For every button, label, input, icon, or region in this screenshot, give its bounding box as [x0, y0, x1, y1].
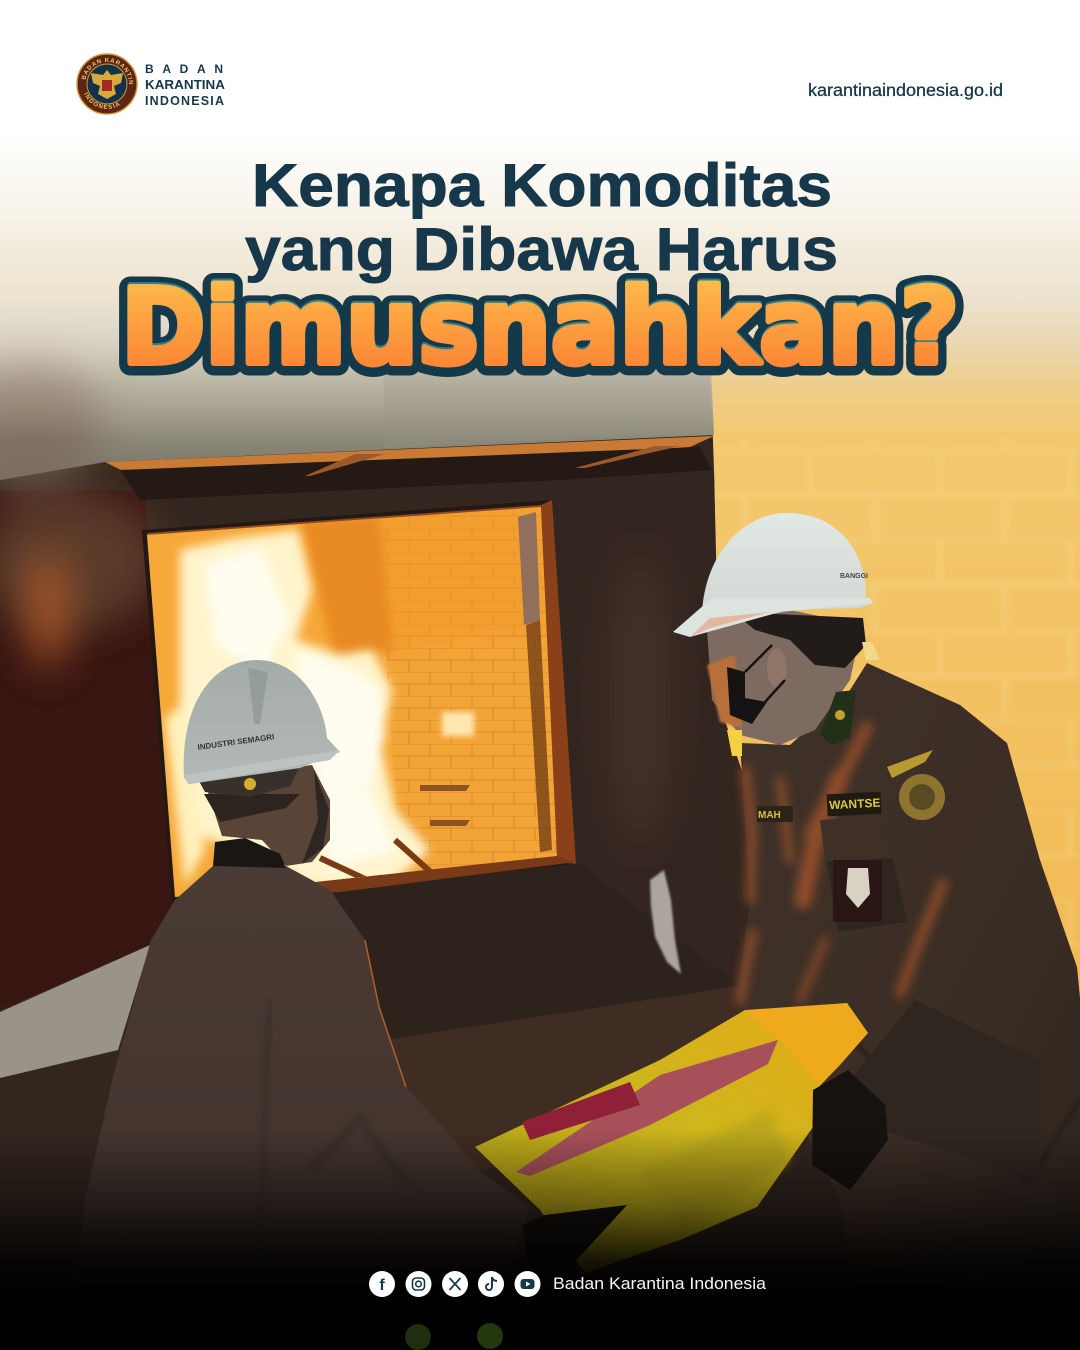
title: first two lines: [245, 152, 838, 283]
breast pocket with emblem: [820, 816, 907, 932]
logo wordmark: BADAN: [145, 62, 223, 76]
chest name tags: MAH: [758, 810, 781, 821]
website url: karantinaindonesia.go.id: [808, 80, 1003, 100]
right officer white helmet: [673, 513, 873, 637]
left officer helmet: INDUSTRI SEMAGRI: [197, 732, 275, 752]
left officer head and neck: [204, 765, 330, 866]
right officer white helmet: BANGGI: [840, 573, 868, 580]
icon: facebook: [369, 1271, 395, 1297]
icon: tiktok: [478, 1271, 504, 1297]
right officer torso: [737, 663, 1080, 1350]
shoulder patch badge: [887, 750, 945, 820]
furnace body: [0, 300, 1080, 1350]
logo: Badan Karantina Indonesia: [76, 53, 225, 115]
title highlight: Dimusnahkan?: Dimusnahkan?: [121, 264, 959, 386]
logo emblem: [76, 53, 138, 115]
blurred green bokeh dots: [405, 1323, 503, 1350]
meat: [516, 1040, 778, 1176]
yellow plastic bag with meat: [475, 1003, 868, 1273]
footer label: Badan Karantina Indonesia: [553, 1274, 767, 1293]
title highlight: Dimusnahkan?: Dimusnahkan?: [121, 267, 959, 389]
collar insignia: [820, 690, 856, 745]
furnace door frame: [142, 500, 576, 904]
metal hood above furnace door: [0, 300, 714, 500]
icon: facebook: f: [379, 1277, 385, 1294]
footer social bar: [369, 1271, 767, 1297]
left officer helmet: [184, 660, 340, 784]
logo wordmark: INDONESIA: [145, 94, 224, 108]
figure: left officer from behind: [70, 660, 530, 1350]
chest name tags: [757, 792, 882, 822]
brick highlights and ash: [442, 712, 474, 736]
concrete ledge at bottom left of furnace: [0, 945, 150, 1078]
furnace window with fire: [147, 505, 557, 897]
left officer jacket: [70, 866, 530, 1350]
chest name tags: WANTSE: [829, 796, 881, 812]
right officer head: [707, 610, 862, 745]
logo wordmark: KARANTINA: [145, 78, 225, 92]
icon: white soot patch on furnace: [650, 870, 681, 974]
title: first two lines: yang Dibawa Harus: [245, 216, 838, 283]
title: first two lines: Kenapa Komoditas: [252, 152, 832, 219]
icon: instagram: [406, 1271, 432, 1297]
icon: youtube: [514, 1271, 540, 1297]
right officer black mask: [727, 667, 767, 724]
black gloves: [523, 1070, 888, 1280]
dark fade at the bottom: [0, 1130, 1080, 1350]
logo wordmark: [145, 62, 225, 108]
figure: right officer: [673, 513, 1080, 1350]
title highlight: Dimusnahkan?: Dimusnahkan?: [121, 266, 959, 388]
smoke fade from white at the top: [0, 0, 1080, 440]
icon: X: [442, 1271, 468, 1297]
logo emblem: INDONESIA: [84, 92, 120, 109]
flames: [165, 530, 430, 890]
orange firelight streaks on uniform: [740, 727, 943, 1000]
